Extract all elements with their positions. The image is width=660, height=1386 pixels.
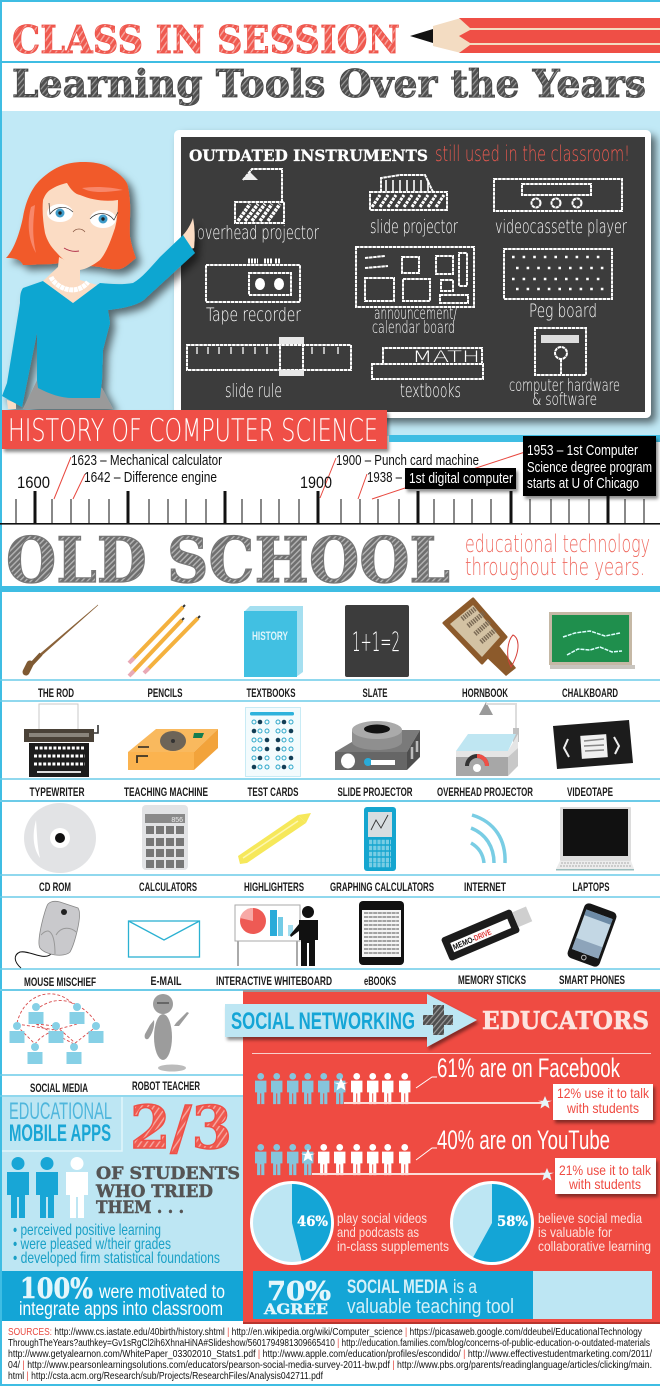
chalkboard heading: OUTDATED INSTRUMENTS xyxy=(189,146,428,165)
row 1 tools xyxy=(26,599,635,677)
icon: textbook: HISTORY xyxy=(252,629,288,643)
subtitle: Learning Tools Over the Years xyxy=(12,61,646,106)
bullet list: • perceived positive learning xyxy=(13,1222,161,1239)
timeline: 1900 – Punch card machine xyxy=(336,452,479,469)
row 2 labels xyxy=(30,785,613,799)
row 2 labels: TYPEWRITER xyxy=(30,785,85,799)
chalk: slide projector: slide projector xyxy=(370,216,458,238)
text: play social videos: and podcasts as xyxy=(337,1224,419,1240)
chalk: tape recorder xyxy=(206,261,301,326)
panel: 70 percent agree xyxy=(253,1271,652,1319)
pictogram: two of three students xyxy=(7,1157,88,1218)
text: play social videos: in-class supplements xyxy=(337,1238,449,1254)
chalk: overhead projector xyxy=(197,169,319,244)
arrow: social networking xyxy=(225,994,477,1047)
row 4 labels: E-MAIL xyxy=(150,974,182,988)
row 4 labels: SMART PHONES xyxy=(559,973,625,987)
text: of students who tried them: OF STUDENTS xyxy=(96,1164,240,1184)
sources: http://www.getyalearnon.com/WhitePaper_03302010_Stats1.pdf | http://www.apple.com/education/profiles/escondido/ | http://www.effectivestudentmarketing.com/2011/ xyxy=(8,1349,652,1360)
row 2 labels: VIDEOTAPE xyxy=(567,785,613,799)
chalk: textbooks: MATH xyxy=(412,347,480,366)
icon: pencil xyxy=(410,18,660,53)
timeline: 1623 – Mechanical calculator xyxy=(71,452,222,469)
labels: social media, robot teacher xyxy=(30,1079,200,1095)
row 2 labels: TEST CARDS xyxy=(248,785,298,799)
icon: calculator xyxy=(142,805,188,870)
panel: 100 percent motivated: were motivated to xyxy=(98,1282,225,1303)
row 4 tools xyxy=(15,901,618,968)
icon: pencils xyxy=(129,605,200,676)
icon: videotape xyxy=(553,720,633,769)
icon: internet arcs xyxy=(471,815,505,863)
icon: plus xyxy=(423,1005,453,1035)
timeline connectors xyxy=(54,452,525,499)
chalk: slide rule xyxy=(187,337,351,402)
icon: chalkboard xyxy=(549,612,635,669)
callout: first digital computer xyxy=(405,468,516,489)
icon: overhead projector xyxy=(456,702,519,776)
panel: 70 percent agree: is a xyxy=(453,1277,477,1298)
row 4 labels: MOUSE MISCHIEF xyxy=(24,975,96,989)
text: believe social media xyxy=(538,1210,651,1254)
neck xyxy=(43,257,97,303)
icon: textbook xyxy=(244,606,303,677)
pie chart: 58 percent: 58% xyxy=(497,1214,528,1230)
row 1 labels xyxy=(38,686,618,700)
timeline xyxy=(0,436,660,525)
row 3 labels xyxy=(39,880,610,894)
blue strip xyxy=(389,435,660,442)
chalk: tape recorder: Tape recorder xyxy=(206,304,301,326)
row 1 labels: THE ROD xyxy=(38,686,74,700)
row 3 tools xyxy=(24,803,634,873)
row 4 labels: eBOOKS xyxy=(364,974,396,988)
callout: 12 percent: with students xyxy=(566,1100,639,1116)
nose and mouth xyxy=(73,229,85,232)
row 2 labels: OVERHEAD PROJECTOR xyxy=(437,785,533,799)
heading: old school: OLD SCHOOL xyxy=(6,523,450,597)
stat: two thirds: 2/3 xyxy=(130,1093,232,1162)
icon: slate xyxy=(345,605,409,677)
pie chart: 58 percent xyxy=(450,1181,534,1265)
bullet list: • developed firm statistical foundations xyxy=(13,1250,220,1267)
text: of students who tried them: THEM . . . xyxy=(96,1198,184,1218)
labels: social media, robot teacher: SOCIAL MEDIA xyxy=(30,1081,88,1095)
panel: 70 percent agree: SOCIAL MEDIA xyxy=(347,1277,448,1298)
icon: interactive whiteboard xyxy=(235,905,318,966)
chalk: computer floppy: & software xyxy=(532,390,597,410)
banner: history of computer science xyxy=(2,410,387,449)
timeline: 1938 – xyxy=(367,469,402,486)
row 4 labels: INTERACTIVE WHITEBOARD xyxy=(216,974,332,988)
panel heading: EDUCATIONAL xyxy=(9,1098,112,1125)
panel: 100 percent motivated xyxy=(2,1271,243,1321)
icon: slide projector xyxy=(335,721,420,770)
chalk: peg board: Peg board xyxy=(529,300,597,322)
panel: 70 percent agree: valuable teaching tool xyxy=(347,1296,514,1318)
icon: memory stick xyxy=(441,903,534,961)
raised hand xyxy=(183,218,195,250)
panel: social networking and educators xyxy=(225,990,660,1322)
stat: youtube xyxy=(255,1125,656,1194)
sources xyxy=(0,1322,660,1386)
text: of students who tried them: WHO TRIED xyxy=(95,1182,213,1202)
illustration: teacher xyxy=(2,162,195,409)
callout: 21 percent: with students xyxy=(568,1176,641,1192)
icon: mouse xyxy=(15,901,79,968)
timeline labels: 1600 xyxy=(17,473,50,492)
row 2 labels: TEACHING MACHINE xyxy=(124,785,208,799)
icon: typewriter xyxy=(24,704,98,777)
timeline: 1642 – Difference engine xyxy=(84,469,217,486)
callout: first digital computer: 1st digital computer xyxy=(409,470,513,487)
row 1 labels: CHALKBOARD xyxy=(562,686,618,700)
row 1 labels: HORNBOOK xyxy=(462,686,508,700)
row 4 labels xyxy=(24,973,625,989)
grid rules xyxy=(0,680,660,1096)
panel: chalkboard xyxy=(174,130,651,418)
icon: social media network xyxy=(10,994,104,1064)
pictogram: youtube people xyxy=(255,1144,410,1175)
chalk: slide projector xyxy=(370,175,458,238)
callout: 21 percent xyxy=(555,1158,656,1194)
icon: slate: 1+1=2 xyxy=(352,627,400,658)
chalk: announcement board: calendar board xyxy=(372,318,455,338)
row 3 labels: HIGHLIGHTERS xyxy=(244,880,304,894)
panel: 100 percent motivated: integrate apps into classroom xyxy=(19,1299,223,1320)
chalk: textbooks: textbooks xyxy=(400,380,461,402)
row 4 labels: MEMORY STICKS xyxy=(458,973,526,987)
heading: educators: EDUCATORS xyxy=(482,1006,649,1035)
chalkboard heading xyxy=(189,142,630,166)
text: play social videos xyxy=(337,1210,449,1254)
skirt xyxy=(23,380,113,409)
panel: 70 percent agree: AGREE xyxy=(263,1302,328,1318)
sweater xyxy=(2,235,195,407)
chalk: announcement board: announcement/ xyxy=(374,304,457,324)
icon: memory stick: DRIVE xyxy=(473,927,493,943)
chalk: videocassette player xyxy=(494,179,627,238)
text: believe social media: is valuable for xyxy=(538,1224,612,1240)
icon: the rod xyxy=(26,605,98,672)
icon: calculator: 856 xyxy=(171,817,183,824)
face xyxy=(43,183,118,270)
chalk: peg board xyxy=(504,249,612,322)
callout: 12 percent xyxy=(553,1084,653,1120)
icon: email envelope xyxy=(128,921,200,957)
icon: graphing calculator xyxy=(364,807,396,871)
lowered hand xyxy=(7,400,16,409)
icon: teaching machine xyxy=(128,729,218,770)
row 3 labels: CALCULATORS xyxy=(139,880,197,894)
banner: history of computer science: HISTORY OF COMPUTER SCIENCE xyxy=(8,413,378,449)
panel heading xyxy=(9,1098,112,1147)
icon: highlighter xyxy=(238,813,311,864)
stat: facebook xyxy=(255,1053,653,1120)
necklace xyxy=(51,277,88,290)
sources: html | http://csta.acm.org/Research/sub/Projects/ResearchFiles/Analysis042711.pdf xyxy=(8,1371,323,1382)
eyes xyxy=(47,203,118,228)
icon: hornbook xyxy=(444,599,518,676)
chalk: slide rule: slide rule xyxy=(225,380,282,402)
pie chart: 46 percent: 46% xyxy=(297,1214,328,1230)
chalk: computer floppy xyxy=(509,328,620,410)
panel: light blue classroom background xyxy=(0,111,660,436)
icon: smart phone xyxy=(566,902,618,968)
icon: robot teacher xyxy=(145,994,189,1072)
arrow: social networking: SOCIAL NETWORKING xyxy=(231,1008,415,1035)
row 2 labels: SLIDE PROJECTOR xyxy=(338,785,413,799)
row 1 labels: TEXTBOOKS xyxy=(246,686,296,700)
icon: cd rom xyxy=(24,803,96,873)
icon: memory stick: MEMO- xyxy=(452,934,476,952)
row 2 tools xyxy=(24,702,633,777)
row 1 labels: PENCILS xyxy=(148,686,182,700)
row 3 labels: LAPTOPS xyxy=(572,880,610,894)
icon: laptop xyxy=(556,807,634,870)
chalk: textbooks xyxy=(372,347,483,402)
header xyxy=(0,0,660,106)
timeline: 1900 xyxy=(300,473,332,492)
bullet list: • were pleased w/their grades xyxy=(13,1236,171,1253)
hair highlights xyxy=(29,205,36,253)
pictogram: facebook people xyxy=(255,1073,410,1104)
row 3 labels: CD ROM xyxy=(39,880,71,894)
panel: 100 percent motivated: 100% xyxy=(20,1272,93,1305)
panel: 70 percent agree: 70% xyxy=(267,1277,331,1307)
row 1 labels: SLATE xyxy=(362,686,388,700)
pie chart: 46 percent xyxy=(250,1181,334,1265)
row 3 labels: GRAPHING CALCULATORS xyxy=(330,880,434,894)
row 3 labels: INTERNET xyxy=(464,880,506,894)
callout: 1953 degree program xyxy=(523,436,656,496)
text: of students who tried them xyxy=(95,1164,240,1218)
panel heading: MOBILE APPS xyxy=(9,1120,111,1147)
hair xyxy=(6,162,136,269)
icon: test cards xyxy=(246,708,300,776)
chalk: announcement board xyxy=(356,247,474,338)
chalk: overhead projector: overhead projector xyxy=(197,222,319,244)
bullet list xyxy=(13,1222,220,1267)
panel: educational mobile apps xyxy=(2,1093,243,1271)
text: play social videos: play social videos xyxy=(337,1210,427,1226)
title: class in session: CLASS IN SESSION xyxy=(12,17,400,62)
labels: social media, robot teacher: ROBOT TEACHER xyxy=(132,1079,200,1093)
icon: ebook reader xyxy=(359,901,404,965)
